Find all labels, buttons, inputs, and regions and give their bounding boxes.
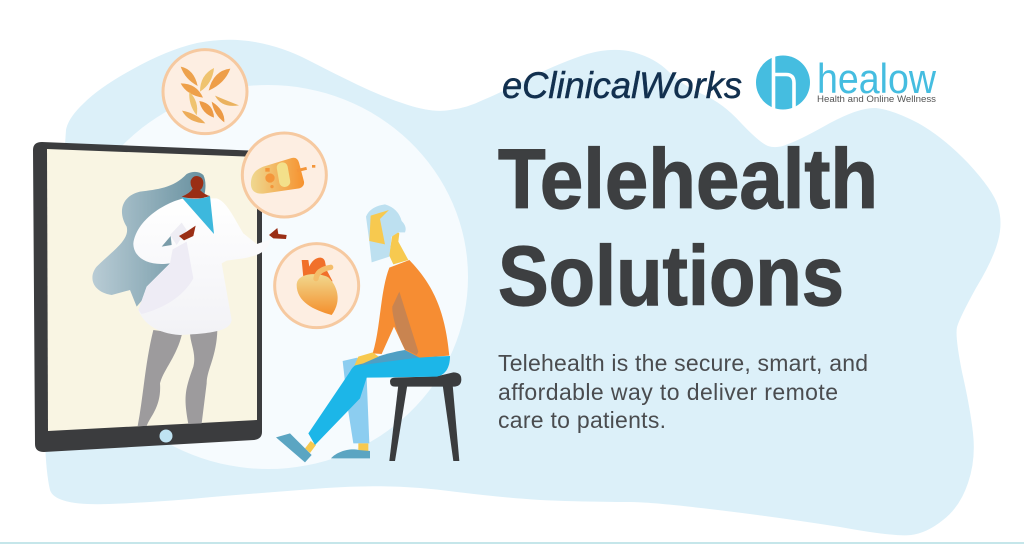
tablet screen: [47, 149, 257, 431]
title: [498, 132, 878, 323]
neck and head: [182, 176, 210, 199]
left hand: [179, 226, 196, 240]
icon: glucose meter: [242, 133, 326, 217]
doctor legs: [138, 330, 217, 426]
healow wordmark: healow: [817, 55, 937, 102]
description text: [498, 350, 868, 433]
blue top: [182, 196, 214, 234]
healow mark: [756, 54, 810, 111]
right hand: [269, 228, 287, 239]
back shoe: [331, 449, 370, 458]
stool: [389, 372, 461, 461]
bottom line: [0, 542, 1024, 544]
hair under arm: [162, 236, 172, 247]
hand: [354, 352, 379, 366]
description text: Telehealth is the secure, smart, and: [498, 350, 868, 376]
description text: care to patients.: [498, 407, 666, 433]
logo: healow: [756, 54, 937, 111]
thigh shading: [357, 350, 420, 366]
doctor coat: [133, 198, 271, 335]
back foot: [358, 443, 368, 452]
logo: eClinicalWorks: eClinicalWorks: [502, 65, 742, 106]
sweater: [373, 260, 449, 358]
coat shading: [138, 242, 193, 314]
back leg: [343, 358, 369, 443]
tablet button: [160, 430, 172, 442]
white circle behind figures: [68, 85, 468, 469]
face: [369, 210, 389, 244]
healow tagline: Health and Online Wellness: [817, 94, 937, 104]
coat sleeve cuff: [170, 223, 187, 245]
description text: affordable way to deliver remote: [498, 379, 838, 405]
icon circles: [163, 50, 359, 328]
front leg: [308, 351, 450, 445]
tablet: [33, 142, 262, 452]
sweater shadow: [392, 292, 418, 355]
title: Telehealth: [498, 132, 878, 226]
icon: heart: [275, 244, 359, 328]
icon: bacteria: [163, 50, 247, 134]
title: Solutions: [498, 229, 844, 323]
front shoe: [276, 433, 312, 462]
neck: [389, 232, 408, 264]
hair and beard: [366, 204, 406, 262]
doctor hair: [92, 172, 206, 307]
patient figure: [276, 204, 461, 462]
doctor figure: [92, 172, 287, 426]
front sock: [305, 441, 316, 453]
